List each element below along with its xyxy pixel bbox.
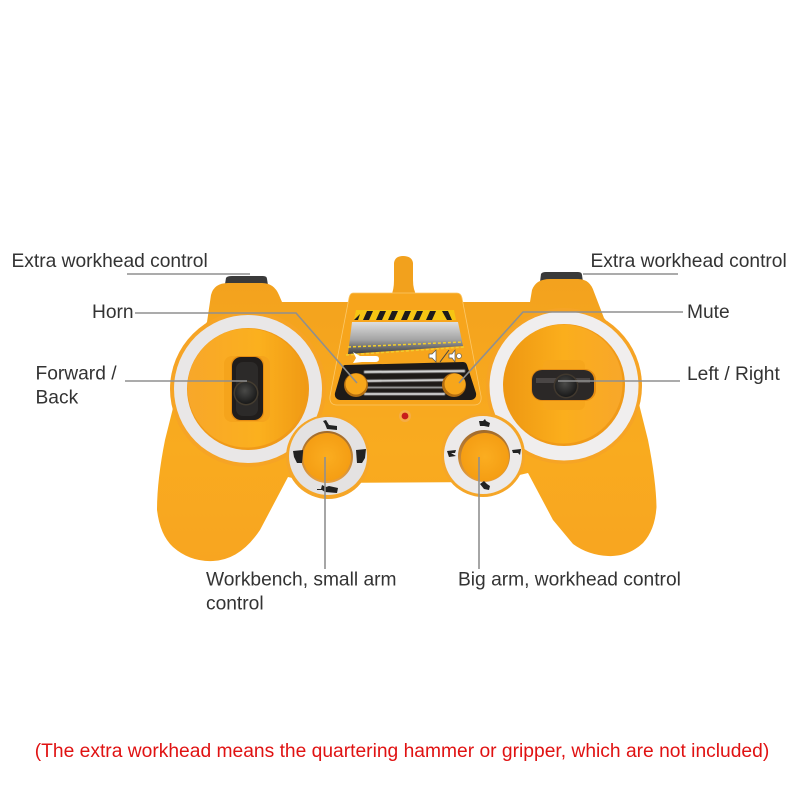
label: workbench: Workbench, small arm [206, 570, 397, 590]
shoulder button: right [540, 272, 583, 282]
leader: mute [459, 312, 683, 383]
horn button [344, 373, 368, 397]
remote control [157, 256, 656, 561]
label: big arm: Big arm, workhead control [458, 570, 681, 590]
leader: left right [558, 380, 680, 382]
antenna [391, 256, 417, 296]
footnote: (The extra workhead means the quartering hammer or gripper, which are not included) [35, 741, 769, 762]
left stick [170, 311, 326, 467]
right small dial [441, 413, 525, 497]
leader: forward back [125, 380, 247, 382]
label: mute: Mute [687, 302, 730, 323]
label: forward back: Forward / [36, 364, 117, 384]
label: extra workhead right: Extra workhead control [590, 251, 787, 272]
label: workbench: control [206, 594, 264, 614]
label: left right: Left / Right [687, 364, 780, 385]
controller body [157, 279, 656, 561]
black grille [335, 362, 476, 400]
mute button [442, 373, 466, 397]
leader: extra workhead right [583, 273, 678, 275]
icon: horn [353, 352, 379, 363]
label: horn: Horn [92, 302, 134, 323]
shoulder button: left [225, 276, 268, 285]
dial icons [293, 420, 366, 493]
label: workbench [206, 570, 397, 614]
indicator LED [399, 410, 411, 422]
dial icons [447, 419, 521, 490]
right stick [486, 308, 642, 464]
central panel [330, 293, 481, 405]
decal: hazard stripes [354, 310, 456, 320]
icon: mute [429, 350, 462, 362]
leader: workbench [324, 457, 326, 569]
leader: big arm [478, 457, 480, 569]
left small dial [286, 415, 370, 499]
leader: extra workhead left [127, 273, 250, 275]
label: forward back [36, 364, 117, 408]
label: forward back: Back [36, 388, 79, 408]
leader: horn [135, 313, 357, 383]
decal: road [346, 322, 464, 355]
label: extra workhead left: Extra workhead control [12, 251, 208, 272]
